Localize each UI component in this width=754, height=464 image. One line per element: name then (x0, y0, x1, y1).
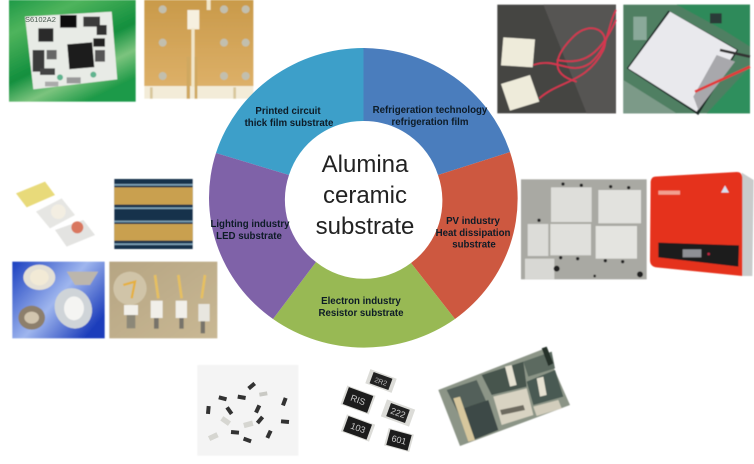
center title: substrate (316, 213, 414, 240)
label: refrigeration technology: refrigeration film (392, 117, 469, 128)
photo: PV heat dissipation plates (521, 179, 647, 279)
segment: electron industry (273, 262, 455, 348)
label: lighting industry: Lighting industry (210, 219, 290, 230)
label: lighting industry: LED substrate (216, 231, 282, 242)
photo: LED chips (16, 182, 95, 247)
label: PV industry: substrate (452, 240, 496, 250)
photo: large chip resistors: 103 (349, 421, 367, 435)
photo: striped gold and navy substrate (114, 179, 193, 249)
photo: large chip resistors: 2R2 (373, 377, 388, 388)
photo: LED downlight fittings (12, 262, 105, 338)
center title: Alumina (322, 151, 409, 178)
chart: donut of application sectors (209, 48, 518, 348)
label: electron industry: Electron industry (321, 296, 401, 307)
label: printed circuit thick film substrate: Printed circuit (255, 106, 321, 117)
photo: large chip resistors (340, 369, 415, 452)
photo: large chip resistors: 222 (389, 406, 407, 420)
segment: refrigeration (364, 48, 510, 175)
segment: printed circuit (216, 48, 364, 175)
photo: large chip resistors: 601 (390, 433, 408, 447)
photo: green circuit module (9, 0, 136, 102)
photo: scattered chip resistors (197, 365, 298, 456)
photo: gold microstrip substrate (144, 0, 253, 99)
photo: filament bulbs (109, 262, 217, 338)
label: PV industry: Heat dissipation (436, 228, 510, 239)
label: PV industry: PV industry (446, 216, 501, 227)
segment: lighting industry (209, 153, 316, 319)
photo: large chip resistors: RIS (349, 393, 367, 407)
center title: ceramic (323, 182, 407, 209)
photo: refrigeration film chips with red wires (497, 5, 616, 113)
label: electron industry: Resistor substrate (318, 308, 404, 319)
photo: red PV inverter (650, 172, 754, 276)
photo: populated circuit board (438, 347, 570, 446)
segment: PV industry (411, 152, 518, 319)
label: board code: S6102A2 (25, 15, 56, 24)
photo: thermal film on circuit board (623, 5, 750, 115)
label: refrigeration technology: Refrigeration technology (373, 105, 488, 116)
label: printed circuit thick film substrate: thick film substrate (245, 118, 334, 129)
